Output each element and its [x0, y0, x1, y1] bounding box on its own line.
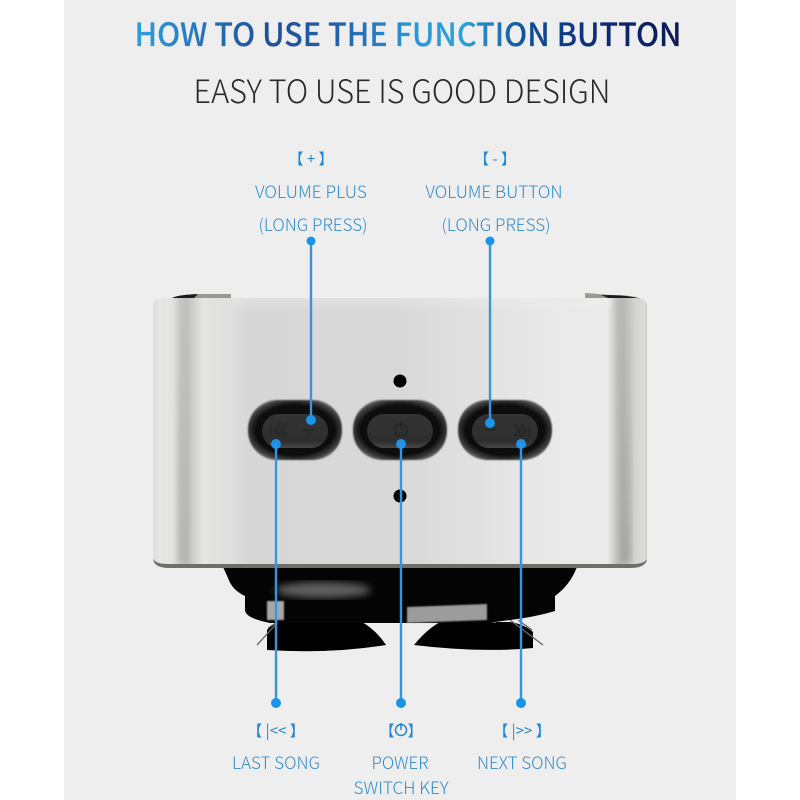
sensor dot: top: [394, 374, 406, 388]
callout: last song: [232, 439, 320, 774]
callout: last song: 【 |<< 】: [247, 720, 305, 741]
callout: power switch key: 【: [379, 720, 395, 741]
callout: power switch key: SWITCH KEY: [354, 774, 449, 799]
callout: volume plus: [255, 148, 368, 425]
button: minus / next: [458, 400, 552, 460]
callout: power switch key: 】: [407, 720, 423, 741]
body bottom lip: [153, 559, 647, 568]
callout: volume button: VOLUME BUTTON: [426, 178, 562, 203]
top edge highlights: [170, 294, 231, 300]
callout: volume plus: VOLUME PLUS: [255, 178, 367, 203]
callout: next song: 【 |>> 】: [493, 720, 551, 741]
right band shading: [620, 302, 632, 562]
callout: volume button: 【 - 】: [474, 148, 516, 169]
suction feet: [257, 619, 543, 651]
callout: volume plus: (LONG PRESS): [258, 211, 368, 236]
callout: volume button: [426, 148, 562, 428]
button: previous / plus: [248, 400, 342, 460]
left band shading: [177, 300, 190, 562]
black base: [223, 567, 577, 623]
sensor dot: bottom: [394, 490, 406, 502]
title: HOW TO USE THE FUNCTION BUTTON: [134, 10, 682, 56]
callout: next song: NEXT SONG: [477, 749, 567, 774]
callout: volume plus: 【 + 】: [288, 148, 334, 169]
callout: power switch key: [354, 439, 449, 799]
top surface highlight: [232, 298, 612, 312]
speaker illustration: [153, 293, 647, 651]
callout: power switch key: POWER: [372, 749, 428, 774]
callout: next song: [477, 439, 567, 774]
callout: last song: LAST SONG: [232, 749, 320, 774]
aluminium body: [153, 298, 647, 564]
subtitle: EASY TO USE IS GOOD DESIGN: [194, 67, 610, 113]
callout: volume button: (LONG PRESS): [442, 211, 550, 236]
button: power: [353, 400, 447, 460]
